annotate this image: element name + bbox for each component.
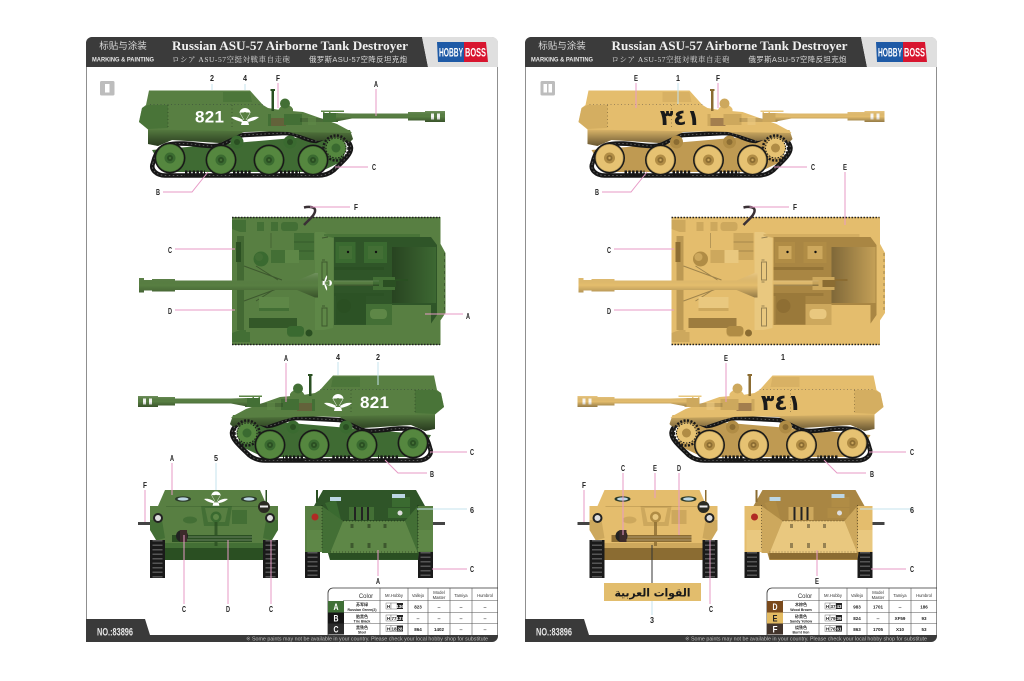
tank: left side view green: [139, 89, 445, 176]
paint table: A B C: --: [438, 604, 441, 610]
footer: product number and note: ※ Some paints may not be available in your country. Please check your local hobby shop for substitute: [246, 636, 488, 642]
paint table: D E F: X10: [896, 627, 904, 632]
callouts: green scheme: D: [168, 306, 172, 316]
callouts: sand scheme: C: [811, 162, 815, 172]
callouts: sand scheme: 3: [650, 615, 654, 625]
footer: product number and note right: [525, 619, 937, 642]
paint table: D E F: Tamiya: [893, 593, 907, 598]
paint table: D E F: 186: [920, 604, 928, 610]
callouts: green scheme: 5: [214, 453, 218, 463]
header: sand scheme: 俄罗斯ASU-57空降反坦克炮: [748, 54, 847, 64]
logo: Hobby Boss: HOBBY: [439, 48, 463, 60]
tank: right side view sand: [578, 374, 884, 460]
callouts: sand scheme: E: [634, 73, 638, 83]
paint table: A B C: Russian Green(2): [348, 608, 376, 612]
paint table: D E F: Vallejo: [851, 593, 864, 598]
tank: right side view green: 821: [360, 393, 389, 412]
logo: Hobby Boss: [437, 42, 488, 62]
paint table: D E F: --: [876, 616, 880, 621]
paint table: A B C: B: [334, 614, 339, 624]
paint table: A B C: 黑铁色: [356, 624, 368, 630]
tank: right side view sand: ٣٤١: [761, 391, 801, 416]
paint table: A B C: C: [334, 624, 339, 634]
paint table: A B C: 77: [391, 616, 397, 621]
logo: Hobby Boss: BOSS: [465, 48, 486, 60]
callouts: sand scheme: F: [793, 202, 797, 212]
callouts: sand scheme: C: [621, 463, 625, 473]
paint table: D E F: 76: [830, 626, 836, 632]
logo: Hobby Boss right: [876, 42, 927, 62]
callouts: sand scheme: D: [607, 306, 611, 316]
callouts: sand scheme: F: [716, 73, 720, 83]
paint table: A B C: Humbrol: [477, 593, 493, 598]
paint table: A B C: --: [460, 616, 463, 621]
paint table: D E F: 93: [921, 616, 927, 621]
callouts: sand scheme: E: [815, 576, 819, 586]
paint table: A B C: Tire Black: [354, 620, 370, 624]
paint table: D E F: 824: [853, 616, 861, 621]
paint table: A B C: 18: [391, 626, 397, 632]
callouts: green scheme: 2: [376, 352, 380, 362]
footer: product number and note: [86, 619, 498, 642]
header: sand scheme: MARKING & PAINTING: [531, 56, 593, 64]
callouts: green scheme: 6: [470, 505, 474, 515]
tank: front view green: [138, 490, 278, 578]
paint table: A B C: --: [460, 627, 463, 632]
header: green scheme: 标贴与涂装: [99, 40, 147, 52]
paint table: D E F: 37: [830, 604, 836, 609]
callouts: green scheme: A: [466, 311, 470, 321]
paint table: D E F: H: [826, 616, 829, 621]
tank: left side view green: 821: [195, 108, 224, 126]
footer: product number and note right: ※ Some paints may not be available in your country. Please check your local hobby shop for substitute: [685, 636, 927, 642]
panel: scheme II sand: [525, 37, 937, 642]
paint table: D E F: Burnt Iron: [793, 630, 809, 634]
paint table: D E F: 43: [836, 604, 842, 609]
panel: scheme I green: [86, 37, 498, 642]
paint table: A B C: Tamiya: [454, 593, 468, 598]
paint table: A B C: 苏军绿: [356, 601, 368, 607]
callouts: green scheme: A: [170, 453, 174, 463]
paint table: D E F: 1705: [873, 627, 884, 632]
logo: Hobby Boss right: BOSS: [904, 48, 925, 60]
header: green scheme: ロシア ASU-57空挺対戦車自走砲: [172, 54, 290, 64]
marker: scheme II: [540, 81, 555, 96]
header: sand scheme: [525, 37, 937, 67]
paint table: D E F: 79: [830, 616, 836, 621]
paint table: D E F: 863: [853, 627, 861, 632]
paint table: A B C: 胎黑色: [356, 613, 368, 619]
paint table: A B C: Model: [433, 590, 445, 595]
tank: left side view sand: [578, 89, 884, 176]
header: green scheme: Russian ASU-57 Airborne Tank Destroyer: [172, 38, 408, 53]
paint table: D E F: 木棕色: [795, 601, 807, 607]
decal: Arabic inscription strip: [604, 583, 701, 601]
callouts: green scheme: D: [226, 604, 230, 614]
footer: product number and note: NO.:83896: [97, 626, 133, 638]
paint table: A B C: 864: [414, 627, 422, 632]
paint table: D E F: --: [898, 604, 902, 610]
callouts: green scheme: 4: [243, 73, 247, 83]
paint table: D E F: 烧铁色: [795, 624, 807, 630]
callouts: sand scheme: E: [724, 353, 728, 363]
paint table: A B C: H: [387, 626, 390, 632]
header: sand scheme: ロシア ASU-57空挺対戦車自走砲: [612, 54, 730, 64]
callouts: sand scheme: [582, 73, 914, 625]
tank: front view sand: [578, 490, 718, 578]
paint table: A B C: --: [484, 627, 487, 632]
paint table: A B C: Steel: [358, 630, 366, 634]
callouts: sand scheme: C: [910, 447, 914, 457]
decal: Arabic inscription strip: القوات العربية: [614, 586, 690, 600]
callouts: green scheme: C: [182, 604, 186, 614]
tank: top view sand: [578, 207, 885, 345]
paint table: D E F: E: [772, 614, 778, 624]
paint table: A B C: 28: [397, 626, 403, 632]
callouts: sand scheme: E: [843, 162, 847, 172]
paint table: A B C: Master: [433, 595, 446, 600]
paint table: D E F: Mr.Hobby: [824, 593, 843, 598]
paint table: D E F: F: [772, 624, 778, 634]
callouts: green scheme: F: [276, 73, 280, 83]
callouts: green scheme: C: [470, 564, 474, 574]
callouts: sand scheme: C: [709, 604, 713, 614]
paint table: A B C: 1402: [434, 627, 445, 632]
paint table: D E F: Color: [798, 594, 812, 600]
tank: rear view sand: [744, 490, 884, 578]
paint table: A B C: H: [387, 616, 390, 621]
callouts: green scheme: F: [354, 202, 358, 212]
paint table: D E F: 53: [921, 627, 927, 632]
callouts: green scheme: C: [168, 245, 172, 255]
tank: left side view sand: ٣٤١: [660, 106, 700, 131]
logo: Hobby Boss right: HOBBY: [878, 48, 902, 60]
paint table: D E F: XF59: [895, 616, 906, 621]
callouts: green scheme: 2: [210, 73, 214, 83]
paint table: D E F: [767, 588, 937, 635]
header: green scheme: 俄罗斯ASU-57空降反坦克炮: [309, 54, 408, 64]
callouts: sand scheme: B: [870, 469, 874, 479]
paint table: A B C: A: [334, 602, 339, 612]
tank: top view green: [139, 207, 446, 345]
callouts: sand scheme: 1: [676, 73, 680, 83]
callouts: green scheme: A: [376, 576, 380, 586]
paint table: A B C: 823: [414, 604, 422, 610]
paint table: A B C: Vallejo: [412, 593, 425, 598]
paint table: A B C: --: [416, 616, 420, 621]
callouts: sand scheme: C: [607, 245, 611, 255]
paint table: A B C: 136: [396, 604, 404, 609]
callouts: green scheme: C: [470, 447, 474, 457]
paint table: D E F: H: [826, 626, 829, 632]
paint table: A B C: Mr.Hobby: [385, 593, 404, 598]
paint table: A B C: --: [484, 616, 487, 621]
paint table: A B C: --: [484, 604, 487, 610]
header: sand scheme: 标贴与涂装: [538, 40, 586, 52]
callouts: sand scheme: F: [582, 480, 586, 490]
paint table: A B C: Color: [359, 594, 373, 600]
paint table: D E F: 砂黄色: [795, 613, 807, 619]
tank: rear view green: [305, 490, 445, 578]
paint table: D E F: Sandy Yellow: [790, 620, 812, 624]
paint table: D E F: Master: [872, 595, 885, 600]
callouts: green scheme: A: [374, 79, 378, 89]
paint table: D E F: 39: [836, 616, 842, 621]
paint table: D E F: H: [826, 604, 829, 609]
callouts: sand scheme: 6: [910, 505, 914, 515]
paint table: A B C: 137: [396, 616, 404, 621]
paint table: A B C: --: [460, 604, 463, 610]
paint table: A B C: --: [438, 616, 441, 621]
paint table: A B C: H: [387, 604, 390, 609]
callouts: green scheme: A: [284, 353, 288, 363]
header: green scheme: MARKING & PAINTING: [92, 56, 154, 64]
callouts: green scheme: B: [430, 469, 434, 479]
header: green scheme: [86, 37, 498, 67]
paint table: A B C: [328, 588, 498, 635]
paint table: D E F: 1701: [873, 604, 884, 610]
callouts: green scheme: B: [156, 187, 160, 197]
callouts: green scheme: C: [372, 162, 376, 172]
callouts: sand scheme: 1: [781, 352, 785, 362]
paint table: D E F: Wood Brown: [790, 608, 812, 612]
paint table: D E F: D: [772, 602, 778, 612]
paint table: D E F: Humbrol: [916, 593, 932, 598]
callouts: sand scheme: C: [910, 564, 914, 574]
callouts: green scheme: 4: [336, 352, 340, 362]
callouts: green scheme: [143, 73, 474, 614]
tank: right side view green: [138, 374, 444, 460]
paint table: D E F: Model: [872, 590, 884, 595]
callouts: sand scheme: D: [677, 463, 681, 473]
paint table: D E F: 61: [836, 626, 842, 632]
paint table: D E F: 983: [853, 604, 861, 610]
marker: scheme I: [100, 81, 114, 96]
callouts: sand scheme: E: [653, 463, 657, 473]
callouts: green scheme: C: [269, 604, 273, 614]
header: sand scheme: Russian ASU-57 Airborne Tank Destroyer: [612, 38, 848, 53]
callouts: green scheme: F: [143, 480, 147, 490]
footer: product number and note right: NO.:83896: [536, 626, 572, 638]
callouts: sand scheme: B: [595, 187, 599, 197]
